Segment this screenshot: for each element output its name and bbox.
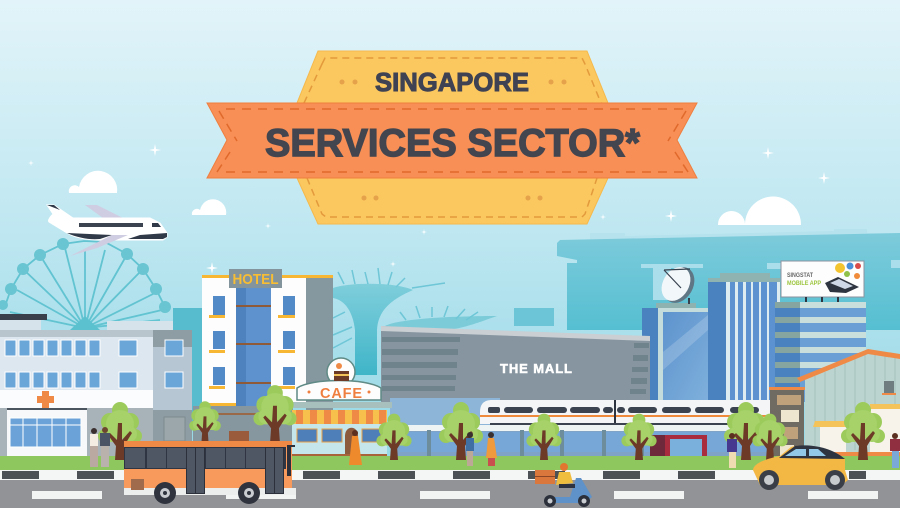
grass strip	[0, 456, 900, 472]
warehouse	[797, 349, 900, 456]
billboard: SingStat mobile app: SINGSTAT	[787, 272, 813, 279]
hospital building	[0, 314, 192, 457]
far skyline: Marina Bay Sands	[173, 229, 900, 428]
MRT station	[390, 398, 780, 456]
building: glass tower 1	[642, 303, 712, 400]
road	[0, 480, 900, 508]
building: office block	[775, 302, 866, 402]
mall building	[381, 326, 650, 402]
orange ribbon	[207, 103, 697, 178]
storage shelves	[769, 387, 805, 456]
clouds	[69, 171, 801, 225]
Ferris wheel	[0, 238, 171, 330]
sparkle stars	[28, 144, 830, 274]
cafe sign: CAFE	[320, 386, 362, 402]
MRT train	[480, 400, 772, 425]
heading: Services Sector: SERVICES SECTOR*	[265, 122, 641, 165]
road kerb	[0, 470, 900, 480]
Gardens by the Bay supertrees	[333, 268, 497, 375]
hospital cross	[37, 391, 54, 408]
yellow hexagon badge	[297, 51, 608, 224]
cafe	[288, 358, 392, 456]
title badge	[207, 51, 697, 224]
pedestrians	[90, 427, 900, 468]
mall sign: THE MALL	[500, 361, 572, 376]
billboard: SingStat mobile app: MOBILE APP	[787, 280, 822, 287]
delivery scooter	[535, 463, 592, 507]
yellow car	[753, 445, 848, 490]
hospital entrance	[7, 408, 87, 457]
airplane	[47, 205, 167, 256]
billboard: SingStat mobile app	[781, 261, 864, 302]
lane markings	[32, 491, 878, 499]
bus	[124, 441, 296, 504]
hotel sign: HOTEL	[232, 271, 278, 288]
building: glass tower 2	[708, 273, 780, 400]
hospital windows	[5, 340, 183, 388]
hotel building	[193, 269, 333, 442]
heading: Singapore: SINGAPORE	[375, 67, 529, 97]
satellite dish	[656, 262, 701, 308]
trees	[98, 385, 885, 460]
